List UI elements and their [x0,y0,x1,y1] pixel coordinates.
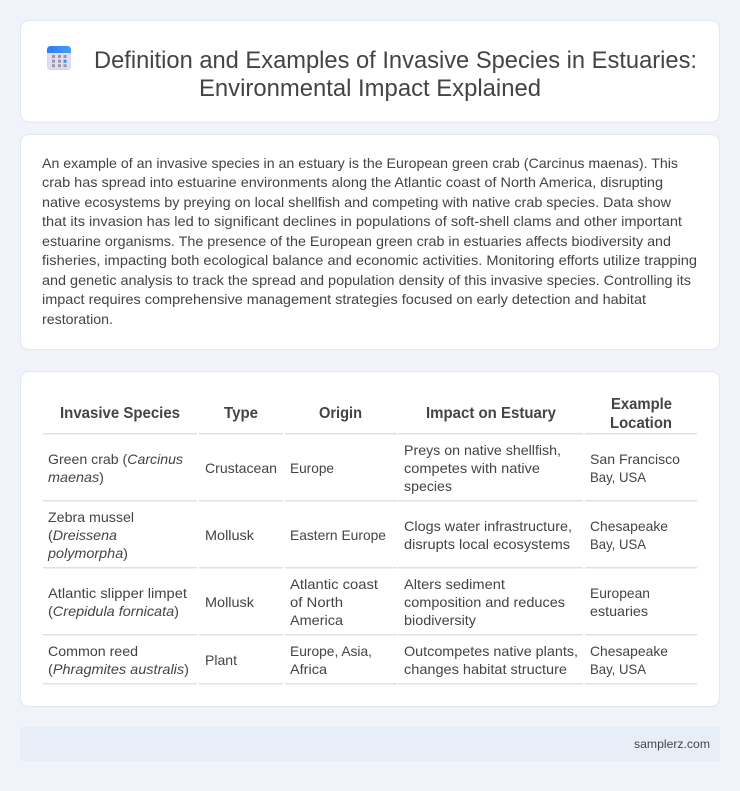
table row: atlantic slipper limpet: Atlantic coast [290,576,378,592]
table row: green crab: San Francisco [590,451,680,467]
table row: atlantic slipper limpet: America [290,612,343,628]
table row: green crab [48,442,680,494]
table row: common reed: Africa [290,661,327,677]
table row: common reed: Europe, Asia, [290,643,372,659]
table row: common reed: Plant [205,652,237,668]
footer bar [20,727,720,761]
table row: green crab: Crustacean [205,460,277,476]
table row: zebra mussel: (Dreissena [48,527,117,543]
panel: title header [20,20,720,122]
table row: common reed: changes habitat structure [404,661,567,677]
text block: description paragraph [42,155,697,327]
table row: green crab: Europe [290,460,334,476]
table row: atlantic slipper limpet: Alters sediment [404,576,505,592]
table row: zebra mussel: Eastern Europe [290,527,386,543]
table row: atlantic slipper limpet: of North [290,594,343,610]
table row: common reed: Outcompetes native plants, [404,643,578,659]
table row: zebra mussel: Clogs water infrastructure, [404,518,572,534]
table row: atlantic slipper limpet: Atlantic slipper limpet [48,585,187,601]
table header: Impact on Estuary [426,405,556,422]
table row: common reed [48,643,668,677]
text block: description paragraph: crab has spread into estuarine environments along the Atlantic coast of North America, disrupting [42,174,663,190]
panel: description [20,134,720,350]
table row: green crab: Preys on native shellfish, [404,442,561,458]
table header: Invasive Species [60,405,180,422]
table header: Origin [319,405,362,422]
table row: atlantic slipper limpet: biodiversity [404,612,476,628]
text block: description paragraph: estuarine organisms. The presence of the European green crab in estuaries affects biodiversity and [42,233,671,249]
table row: common reed: Common reed [48,643,138,659]
table row: zebra mussel: Zebra mussel [48,509,134,525]
table row: zebra mussel: Chesapeake [590,518,668,534]
text block: description paragraph: that its invasion has led to significant declines in populations of soft-shell clams and other important [42,213,682,229]
table row: atlantic slipper limpet: composition and reduces [404,594,565,610]
table header [60,396,672,432]
table row: zebra mussel: Mollusk [205,527,255,543]
table row: green crab: species [404,478,452,494]
title [94,47,697,102]
text block: description paragraph: and genetic analysis to track the spread and population density of this invasive species. Controlling its [42,272,691,288]
table row: atlantic slipper limpet: European [590,585,650,601]
table header: Example [611,396,672,413]
title: Environmental Impact Explained [199,75,541,102]
text block: description paragraph: native ecosystems by preying on local shellfish and competing with native crab species. Data show [42,194,672,210]
table row: zebra mussel: polymorpha) [47,545,128,561]
table row: atlantic slipper limpet: Mollusk [205,594,255,610]
panel: species table [20,372,720,706]
text block: description paragraph: fisheries, impacting both ecological balance and economic activities. Monitoring efforts utilize trapping [42,252,697,268]
text block: description paragraph: An example of an invasive species in an estuary is the European green crab (Carcinus maenas). This [42,155,678,171]
table row: common reed: Bay, USA [590,661,647,677]
table row: zebra mussel: Bay, USA [590,536,647,552]
table header: Location [610,415,672,432]
icon: calendar [47,46,71,70]
table row: green crab: maenas) [48,469,104,485]
table header: Type [224,405,258,422]
table row: green crab: Bay, USA [590,469,647,485]
table row: zebra mussel: disrupts local ecosystems [404,536,570,552]
footer bar: samplerz.com [634,737,710,751]
title: Definition and Examples of Invasive Species in Estuaries: [94,47,697,74]
table row: common reed: Chesapeake [590,643,668,659]
table row: green crab: Green crab (Carcinus [48,451,183,467]
table row: zebra mussel [47,509,668,561]
table row: atlantic slipper limpet [48,576,650,628]
table row: atlantic slipper limpet: estuaries [590,603,648,619]
table row: common reed: (Phragmites australis ) [48,661,189,677]
table row: atlantic slipper limpet: (Crepidula fornicata ) [48,603,179,619]
text block: description paragraph: restoration. [42,311,113,327]
table row: green crab: competes with native [404,460,540,476]
text block: description paragraph: impact requires comprehensive management strategies focused on early detection and habitat [42,291,646,307]
